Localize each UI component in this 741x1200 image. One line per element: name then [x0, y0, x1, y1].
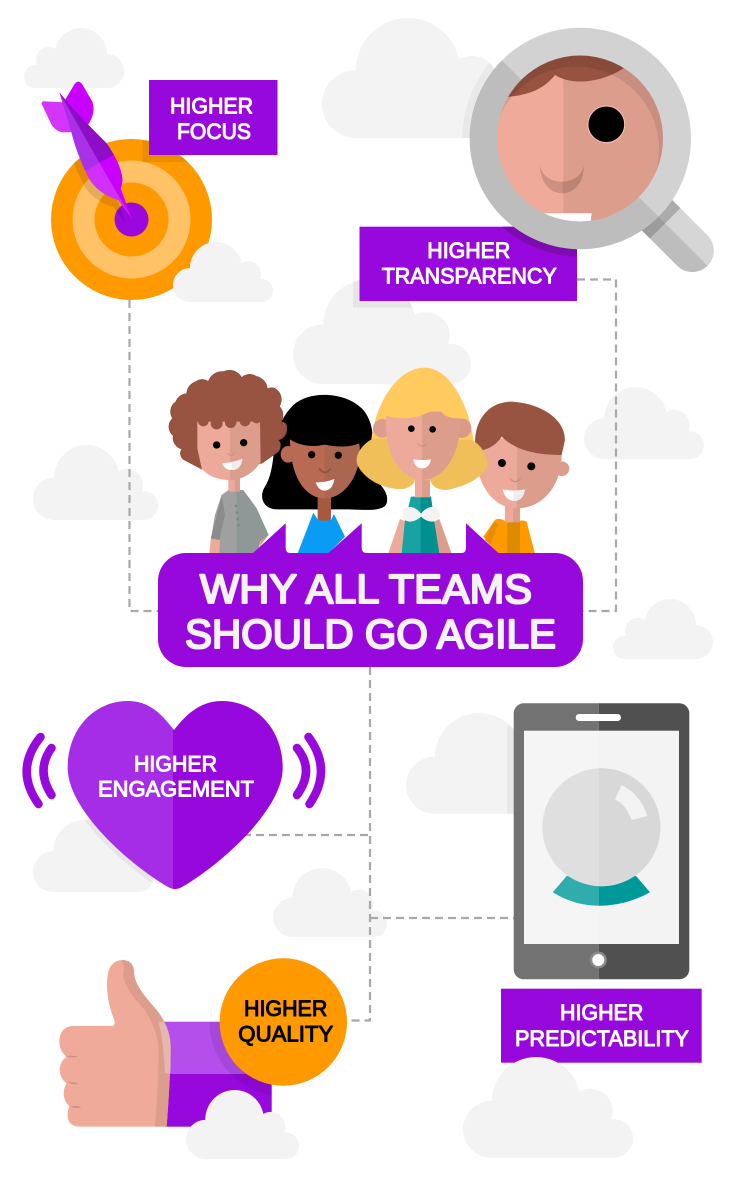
icon: magnifying glass: [470, 28, 714, 272]
label: higher focus: FOCUS: [177, 119, 251, 144]
crystal ball: [542, 768, 660, 906]
label: higher transparency: TRANSPARENCY: [382, 264, 557, 288]
shadows cast on clouds: [68, 20, 698, 889]
label: higher transparency: HIGHER: [427, 238, 510, 263]
person: blonde woman: [357, 368, 487, 553]
icon: target: [51, 139, 212, 300]
title text: WHY ALL TEAMS: [200, 566, 532, 612]
cloud over target: [173, 242, 273, 302]
label: higher transparency: [360, 226, 577, 301]
badge: higher quality: HIGHER: [244, 996, 327, 1021]
title speech bubble: [158, 523, 583, 667]
person: curly hair: [169, 370, 287, 553]
label: higher predictability: HIGHER: [560, 1000, 643, 1025]
person: woman with black hair: [262, 395, 387, 553]
icon: heart with label higher engagement: [68, 701, 283, 889]
handle and ring: [424, 0, 741, 344]
icon: vibration arcs: [27, 737, 321, 804]
label: higher predictability: PREDICTABILITY: [515, 1026, 689, 1051]
background clouds: [24, 18, 713, 937]
icon: thumbs up with sleeve: [59, 960, 272, 1127]
person: boy: [475, 402, 569, 553]
label: higher focus: HIGHER: [170, 94, 253, 118]
foreground cloud bottom right: [463, 1057, 633, 1158]
label: higher focus: [149, 80, 278, 155]
icon: dart: [42, 82, 140, 220]
icon: heart with label higher engagement: HIGHER: [134, 752, 217, 777]
label: higher predictability: [501, 988, 702, 1063]
badge: higher quality: QUALITY: [238, 1022, 334, 1047]
panel: team of people: [169, 368, 569, 553]
badge: higher quality: [220, 958, 347, 1086]
title speech bubble: SHOULD GO AGILE: [185, 611, 556, 657]
foreground cloud over sleeve: [186, 1090, 299, 1159]
magnified face: [497, 56, 663, 222]
icon: heart with label higher engagement: ENGAGEMENT: [98, 777, 254, 802]
icon: smartphone with crystal ball: [514, 703, 689, 979]
dashed connectors: [130, 280, 616, 1020]
